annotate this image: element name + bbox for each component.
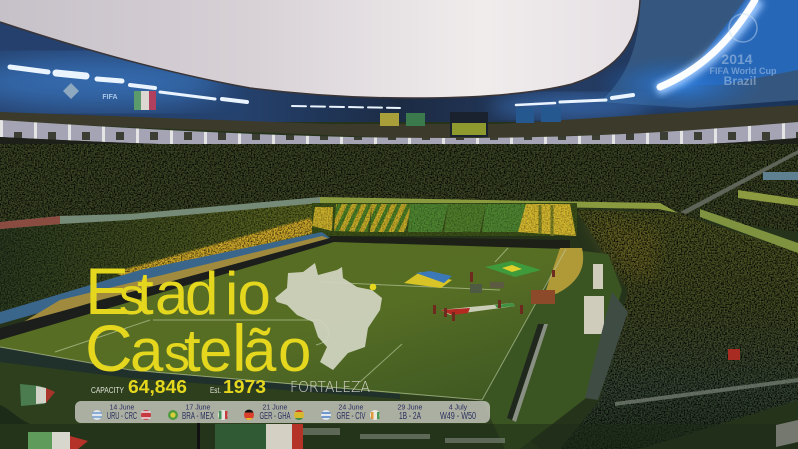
watermark: FIFA World Cup logo [710,14,777,88]
flags on pitch [404,261,541,315]
match schedule bar: 4 July [449,404,468,412]
upper crowd [0,144,798,232]
match schedule bar [75,401,490,423]
title: stadium name: t [137,260,154,327]
pitch [0,242,566,400]
main roof floodlight [657,0,759,90]
match schedule bar: 21 June [263,404,288,412]
right barrier [615,378,798,406]
match schedule bar: 14 June [110,404,135,412]
stadium facts [91,377,370,397]
title: stadium name: E [85,254,129,328]
lower roof edge [0,105,798,140]
seats strip [0,120,798,149]
pitch lines [0,248,566,400]
left ribbon banners [0,197,320,229]
roof hanging flags and scoreboard: FIFA [102,94,118,101]
players on pitch [433,270,555,321]
title: stadium name: a [155,260,189,327]
roof hanging flags and scoreboard [63,83,561,137]
stadium facts: CAPACITY [91,386,125,395]
stadium facts: Est. [210,386,221,395]
sky opening [0,0,640,98]
central stand colored sections [312,203,577,236]
match schedule bar: BRA - MEX [182,411,214,422]
foreground bottom stand [0,424,798,449]
match schedule bar: 1B - 2A [399,411,421,422]
title: stadium name: ã [243,317,277,384]
pitch-side ad boards [330,236,570,249]
title: stadium name: s [119,268,145,326]
dark foreground apron [0,352,540,449]
match schedule bar: GER - GHA [260,411,291,422]
title: stadium name: s [164,325,190,383]
flags [92,410,380,420]
icon: Brazil map with Fortaleza marker [275,263,382,370]
foreground flags [20,384,55,406]
title: stadium name: e [199,317,232,384]
title: stadium name: i [225,260,238,327]
match schedule bar: W49 - W50 [440,411,476,422]
right touch apron [482,249,622,449]
stadium facts: FORTALEZA [290,378,370,396]
title: stadium name: t [184,317,201,384]
title: stadium name: C [85,311,133,385]
roof underside [0,0,798,122]
right blue roof [600,0,798,108]
match schedule bar: 17 June [186,404,211,412]
watermark: FIFA World Cup logo: FIFA World Cup [710,66,777,76]
title: stadium name: o [238,260,271,327]
watermark: FIFA World Cup logo: 2014 [721,51,753,67]
stadium facts: 1973 [223,377,266,397]
match schedule bar: 29 June [398,404,423,412]
roof lights [10,67,633,108]
match schedule bar: 24 June [339,404,364,412]
right sideline bench [512,324,548,422]
title: stadium name: d [185,260,218,327]
right stand crowd [560,209,798,449]
left lower crowd [0,203,322,312]
title: stadium name: a [130,317,164,384]
match schedule bar: URU - CRC [107,411,137,422]
watermark: FIFA World Cup logo: Brazil [724,74,756,88]
stadium facts: 64,846 [128,377,187,397]
title: stadium name: o [278,317,311,384]
match schedule bar: GRE - CIV [336,411,366,422]
title: stadium name [85,254,311,385]
tents on sideline [584,264,604,334]
title: stadium name: l [232,311,247,385]
